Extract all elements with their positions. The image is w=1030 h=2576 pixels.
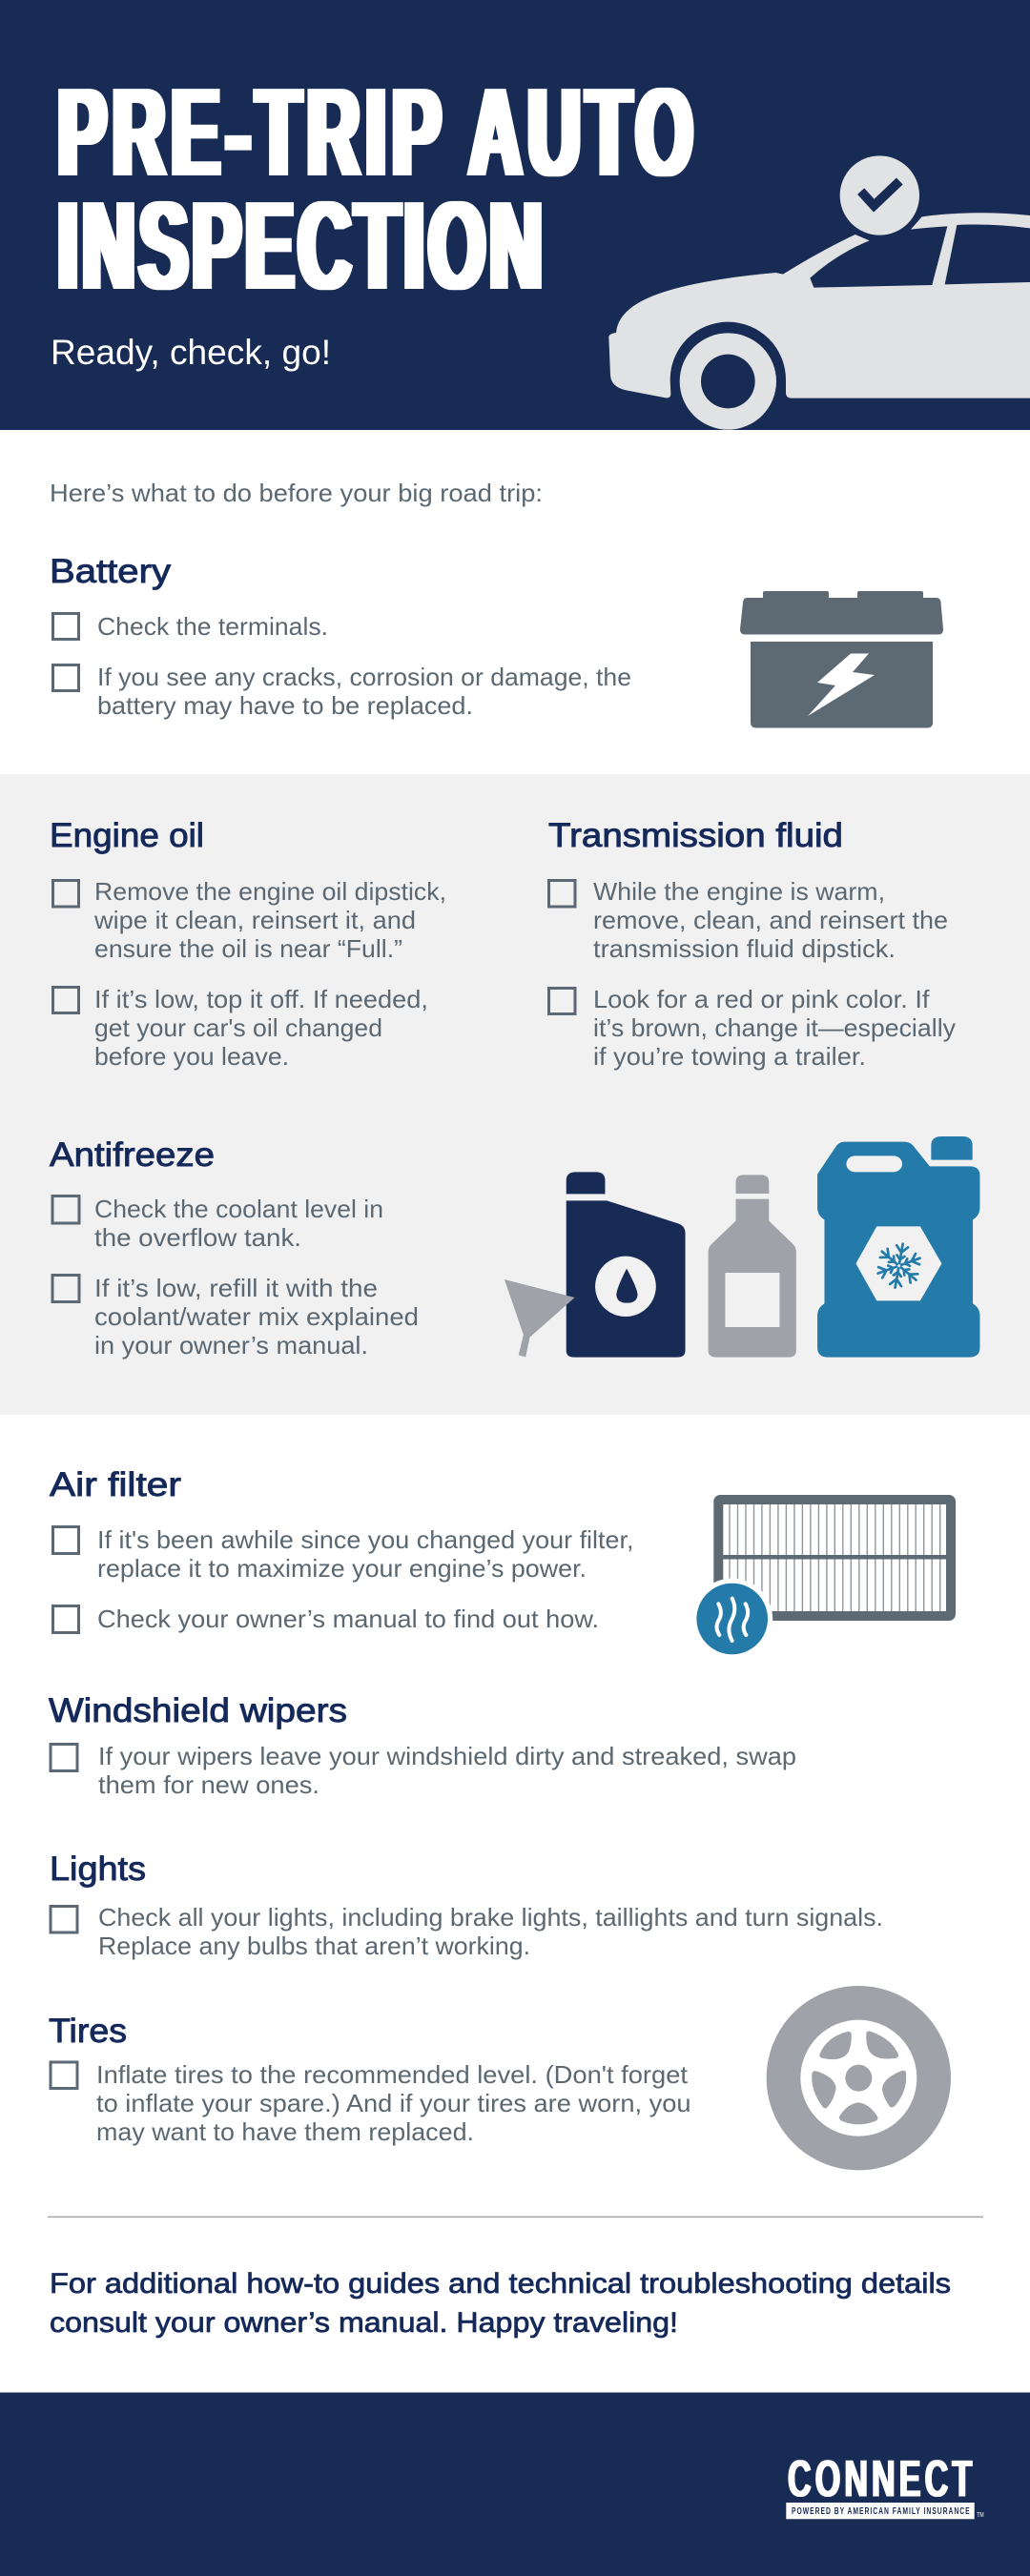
checklist item: dipstick: Remove the engine oil dipstick,	[94, 877, 446, 906]
checklist item: swap wipers: If your wipers leave your windshield dirty and streaked, swap	[98, 1742, 796, 1770]
checklist item: terminals: Check the terminals.	[97, 612, 328, 641]
heading: transmission fluid: Transmission fluid	[548, 817, 843, 854]
checklist item: top off: before you leave.	[94, 1042, 289, 1071]
heading: battery: Battery	[50, 553, 172, 590]
checklist item: check lights	[51, 1903, 883, 1960]
section: antifreeze	[50, 1136, 419, 1360]
heading: tires: Tires	[49, 2013, 127, 2050]
section: transmission fluid	[548, 817, 956, 1071]
checklist item: warm engine	[549, 877, 948, 963]
checklist item: dipstick: wipe it clean, reinsert it, and	[93, 906, 416, 934]
checklist item: inflate tires: may want to have them replaced.	[96, 2117, 474, 2146]
icon: tire	[767, 1986, 951, 2170]
checklist item: dipstick	[53, 877, 446, 963]
checklist item: refill	[52, 1274, 419, 1360]
checklist item: inflate tires: Inflate tires to the recommended level. (Don't forget	[96, 2060, 689, 2089]
checklist item: damage: battery may have to be replaced.	[97, 691, 473, 720]
heading: antifreeze: Antifreeze	[50, 1136, 215, 1174]
checklist item: warm engine: While the engine is warm,	[593, 877, 885, 906]
logo: Connect: POWERED BY AMERICAN FAMILY INSURANCE	[792, 2504, 970, 2516]
heading: engine oil: Engine oil	[50, 817, 204, 854]
panel: air filter	[50, 1466, 951, 1659]
checklist item: coolant level: the overflow tank.	[94, 1223, 301, 1252]
checklist item: inflate tires: to inflate your spare.) And if your tires are worn, you	[96, 2089, 691, 2117]
panel: battery	[50, 553, 943, 728]
closing message	[50, 2268, 951, 2339]
footer band	[0, 2393, 1030, 2576]
header banner	[0, 0, 1030, 430]
panel: windshield wipers	[49, 1692, 796, 1799]
subtitle: Ready, check, go!	[51, 333, 331, 372]
checklist item: coolant level: Check the coolant level in	[94, 1195, 383, 1223]
icon: antifreeze jug	[817, 1136, 979, 1358]
checklist item: color: Look for a red or pink color. If	[593, 985, 930, 1013]
checklist item: swap wipers: them for new ones.	[98, 1770, 319, 1799]
closing message: consult your owner’s manual. Happy traveling!	[50, 2307, 678, 2339]
heading: air filter: Air filter	[50, 1466, 181, 1503]
checklist item: replace filter	[53, 1525, 633, 1583]
checklist item: check lights: Check all your lights, including brake lights, taillights and turn signals.	[98, 1903, 883, 1932]
checklist item: owner's manual: Check your owner’s manual to find out how.	[97, 1605, 599, 1633]
icon: oil bottle	[566, 1172, 686, 1358]
panel: tires	[49, 1986, 951, 2170]
checklist item: top off: get your car's oil changed	[94, 1013, 382, 1042]
title	[57, 61, 692, 316]
icon: funnel	[505, 1279, 575, 1357]
section: engine oil	[50, 817, 446, 1071]
panel: lights	[50, 1850, 883, 1960]
panel: fluids (gray band)	[0, 774, 1030, 1415]
icon: air filter	[691, 1500, 951, 1659]
icon: car with check mark	[608, 155, 1030, 430]
intro text: Here’s what to do before your big road trip:	[50, 479, 543, 507]
checklist item: coolant level	[52, 1195, 383, 1252]
checklist item: color: it’s brown, change it—especially	[593, 1013, 956, 1042]
checklist item: swap wipers	[51, 1742, 796, 1799]
title: INSPECTION	[57, 174, 543, 316]
heading: lights: Lights	[50, 1850, 146, 1888]
logo: Connect: TM	[977, 2512, 984, 2519]
checklist item: refill: coolant/water mix explained	[94, 1302, 419, 1331]
icon: transmission fluid bottle	[709, 1175, 796, 1358]
icon: fluid bottles and funnel	[505, 1136, 979, 1358]
heading: windshield wipers: Windshield wipers	[49, 1692, 347, 1729]
checklist item: warm engine: remove, clean, and reinsert the	[593, 906, 948, 934]
checklist item: refill: If it’s low, refill it with the	[94, 1274, 378, 1302]
checklist item: color	[549, 985, 956, 1071]
checklist item: damage: If you see any cracks, corrosion or damage, the	[97, 663, 631, 691]
checklist item: refill: in your owner’s manual.	[94, 1331, 368, 1360]
checklist item: replace filter: replace it to maximize your engine’s power.	[97, 1554, 587, 1583]
checklist item: warm engine: transmission fluid dipstick.	[593, 934, 896, 963]
icon: battery	[740, 591, 943, 728]
title: PRE-TRIP AUTO	[57, 61, 692, 202]
closing message: For additional how-to guides and technical troubleshooting details	[50, 2268, 951, 2300]
checklist item: inflate tires	[51, 2060, 691, 2146]
checklist item: top off	[53, 985, 428, 1071]
checklist item: color: if you’re towing a trailer.	[593, 1042, 866, 1071]
checklist item: damage	[53, 663, 631, 720]
checklist item: check lights: Replace any bulbs that aren’t working.	[98, 1932, 530, 1960]
checklist item: dipstick: ensure the oil is near “Full.”	[94, 934, 402, 963]
logo: Connect: CONNECT	[788, 2449, 972, 2508]
checklist item: top off: If it’s low, top it off. If needed,	[94, 985, 428, 1013]
checklist item: replace filter: If it's been awhile since you changed your filter,	[97, 1525, 633, 1554]
